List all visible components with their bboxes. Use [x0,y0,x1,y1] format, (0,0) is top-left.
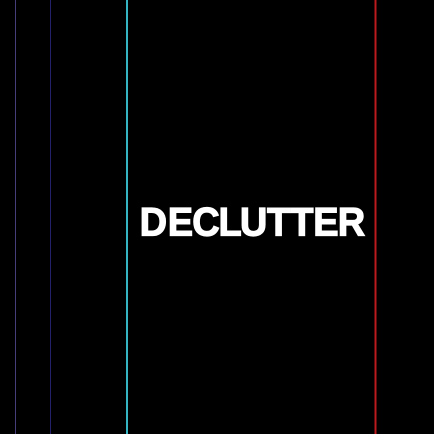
line: faint purple [15,0,16,434]
line: red [374,0,376,434]
title: DECLUTTER [140,201,365,245]
line: cyan [126,0,128,434]
line: dark blue [50,0,51,434]
